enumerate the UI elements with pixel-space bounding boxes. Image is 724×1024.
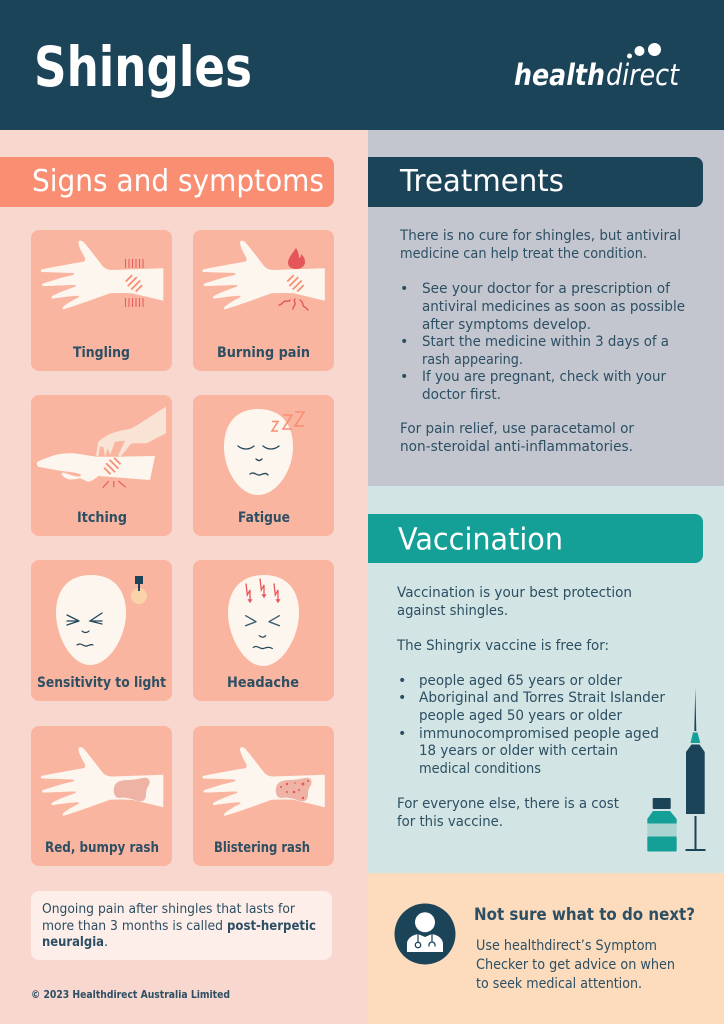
callout: post-herpetic neuralgia: neuralgia xyxy=(42,935,104,950)
card: tingling xyxy=(31,230,172,371)
text block: vaccination: medical conditions xyxy=(419,761,541,777)
text block: treatments: antiviral medicines as soon as possible xyxy=(422,299,685,315)
icon: syringe xyxy=(686,688,706,851)
header banner xyxy=(0,0,724,130)
text block: treatments: doctor first. xyxy=(422,387,501,403)
healthdirect logo: health xyxy=(514,58,605,92)
heading: vaccination xyxy=(368,514,703,563)
text block: vaccination: against shingles. xyxy=(397,603,508,619)
panel: not sure what to do next: Not sure what to do next? xyxy=(474,905,695,925)
icon: hand with blisters xyxy=(202,747,325,816)
text block: vaccination: Aboriginal and Torres Strait Islander xyxy=(419,690,665,706)
text block: vaccination: people aged 50 years or older xyxy=(419,708,622,724)
icon: sleepy face xyxy=(224,409,304,495)
text block: vaccination: For everyone else, there is a cost xyxy=(397,796,619,812)
panel: not sure what to do next xyxy=(394,904,695,992)
title: Shingles xyxy=(34,35,252,99)
heading: signs and symptoms: Signs and symptoms xyxy=(32,164,324,199)
icon: face with lightning arrows xyxy=(228,575,299,666)
text block: treatments: • xyxy=(400,281,408,297)
card: fatigue xyxy=(193,395,334,536)
card: tingling: Tingling xyxy=(73,345,130,361)
card: itching xyxy=(31,395,172,536)
icon: squinting face and light bulb xyxy=(56,575,147,665)
text block: treatments xyxy=(399,228,685,455)
heading: treatments: Treatments xyxy=(399,164,564,199)
heading: signs and symptoms xyxy=(0,157,334,207)
text block: vaccination: • xyxy=(398,690,406,706)
healthdirect logo: direct xyxy=(606,58,680,92)
card: red, bumpy rash xyxy=(31,726,172,866)
text block: vaccination: • xyxy=(398,726,406,742)
text block: vaccination: 18 years or older with certain xyxy=(419,743,618,759)
text block: treatments: There is no cure for shingles, but antiviral xyxy=(399,228,681,244)
card: burning pain xyxy=(193,230,334,371)
text block: treatments: Start the medicine within 3 days of a xyxy=(422,334,669,350)
text block: treatments: medicine can help treat the condition. xyxy=(400,246,647,262)
callout: post-herpetic neuralgia: Ongoing pain after shingles that lasts for xyxy=(42,902,296,917)
panel: not sure what to do next: Use healthdirect’s Symptom xyxy=(476,938,657,954)
icon: hand with tingling xyxy=(41,241,163,309)
icon: hand with flame xyxy=(202,241,325,310)
text block: vaccination: people aged 65 years or older xyxy=(419,673,622,689)
icon: hand with red rash xyxy=(41,747,163,816)
text block: treatments: rash appearing. xyxy=(422,352,523,368)
text block: vaccination: The Shingrix vaccine is free for: xyxy=(396,638,609,654)
panel: not sure what to do next: to seek medical attention. xyxy=(476,976,642,992)
card: burning pain: Burning pain xyxy=(217,345,310,361)
card: blistering rash xyxy=(193,726,334,866)
text block: vaccination: Vaccination is your best protection xyxy=(397,585,632,601)
text block: vaccination: immunocompromised people aged xyxy=(419,726,659,742)
text block: treatments: For pain relief, use paracetamol or xyxy=(400,421,634,437)
text block: treatments: after symptoms develop. xyxy=(422,317,591,333)
heading: vaccination: Vaccination xyxy=(398,522,563,558)
callout: post-herpetic neuralgia: more than 3 months is called xyxy=(42,919,223,934)
callout: post-herpetic neuralgia xyxy=(31,891,332,960)
card: sensitivity to light xyxy=(31,560,172,701)
card: headache xyxy=(193,560,334,701)
copyright: © 2023 Healthdirect Australia Limited xyxy=(31,990,230,1001)
text block: treatments: • xyxy=(400,334,408,350)
icon: scratching hand on arm xyxy=(37,407,166,488)
text block: treatments: non-steroidal anti-inflammatories. xyxy=(400,439,633,455)
text block: treatments: See your doctor for a prescription of xyxy=(422,281,671,297)
callout: post-herpetic neuralgia: . xyxy=(104,935,108,950)
icon: vaccine vial xyxy=(647,798,677,852)
icon: doctor xyxy=(394,904,456,964)
heading: treatments xyxy=(368,157,703,207)
text block: vaccination: for this vaccine. xyxy=(397,814,503,830)
text block: treatments: • xyxy=(400,369,408,385)
card: headache: Headache xyxy=(227,675,299,691)
healthdirect logo xyxy=(514,43,680,92)
callout: post-herpetic neuralgia: post-herpetic xyxy=(227,919,316,934)
card: blistering rash: Blistering rash xyxy=(214,840,310,856)
card: fatigue: Fatigue xyxy=(238,510,290,526)
text block: treatments: If you are pregnant, check with your xyxy=(422,369,666,385)
card: itching: Itching xyxy=(77,510,127,526)
card: sensitivity to light: Sensitivity to light xyxy=(37,675,166,691)
card: red, bumpy rash: Red, bumpy rash xyxy=(45,840,159,856)
text block: vaccination: • xyxy=(398,673,406,689)
text block: vaccination xyxy=(396,585,665,830)
panel: not sure what to do next: Checker to get advice on when xyxy=(476,957,675,973)
